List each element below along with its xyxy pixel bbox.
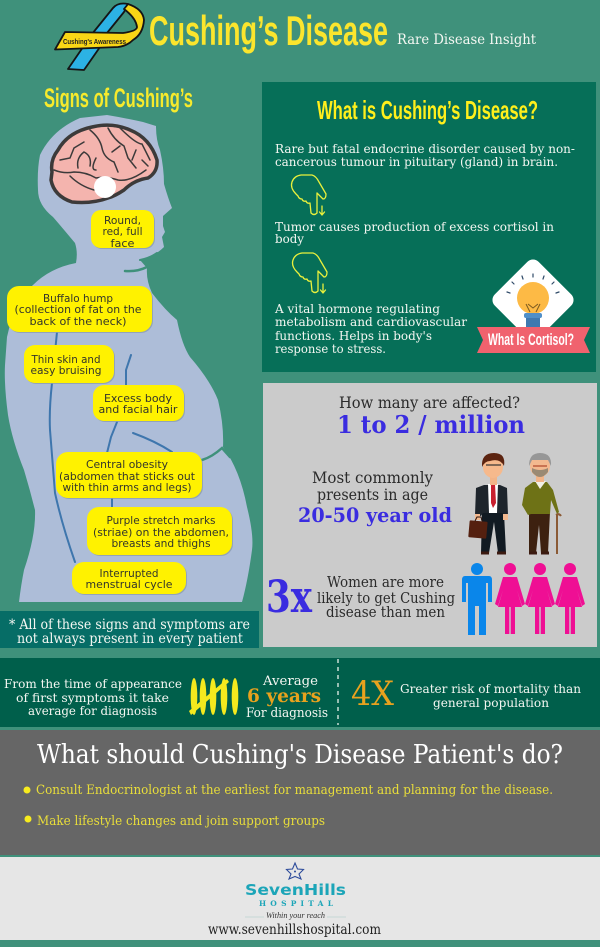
label: stretch marks: (striae) on the abdomen, [93,527,229,539]
text: time to diagnosis: average for diagnosis [28,703,157,718]
text: 3x stat: 3x [266,572,313,623]
text: hormone description: response to stress. [275,341,386,356]
title: Cushing’s Disease [149,7,388,54]
icon: woman figure [525,563,555,634]
icon: man figure [462,563,492,635]
text: definition: cancerous tumour in pituitary (gland) in brain. [275,154,558,169]
text: women more likely: disease than men [326,603,445,621]
label: menstrual cycle [72,562,187,595]
icon: woman figure [495,563,525,634]
label: menstrual cycle: Interrupted [100,568,158,580]
label: excess hair [93,385,185,422]
icon: cortisol light bulb [477,256,590,353]
text: women more likely: likely to get Cushing [317,589,455,607]
label: stretch marks [87,507,233,556]
text: six years [246,674,328,721]
label: stretch marks: breasts and thighs [112,538,210,550]
label: round face: Round, [104,215,141,227]
panel: what patients should do [0,730,600,855]
subtitle: Rare Disease Insight [397,32,536,48]
label: central obesity: Central obesity [86,459,168,471]
text: women more likely: Women are more [327,573,444,591]
label: round face: face [110,238,134,250]
silhouette [5,115,252,602]
panel: diagnosis and mortality band [0,658,600,727]
logo: SevenHills Hospital [245,863,346,920]
icon: pointing hand [292,253,327,293]
text: women more likely [317,573,455,621]
text: age range: 20-50 year old [298,503,452,527]
label: thin skin: easy bruising [30,365,102,377]
text: time to diagnosis: of first symptoms it take [16,690,169,705]
label: central obesity [56,452,203,499]
panel: how many are affected [263,383,597,647]
text: age range: Most commonly [312,468,433,487]
text: tumor causes cortisol: Tumor causes production of excess cortisol in [275,219,554,234]
text: 4x stat: 4X [351,674,395,714]
text: prevalence: 1 to 2 / million [337,410,525,439]
icon: woman figure [555,563,585,634]
callout: symptom note: * All of these signs and symptoms are [9,617,250,633]
logo: SevenHills Hospital: SevenHills [245,881,346,899]
text: definition [275,141,575,169]
label: stretch marks: Purple stretch marks [106,515,216,527]
panel: body silhouette with signs [5,115,252,602]
body lines [50,253,230,562]
icon: younger man with briefcase [468,453,508,553]
logo: SevenHills Hospital: HOSPITAL [259,899,334,908]
text: time to diagnosis: From the time of appearance [4,676,182,691]
label: central obesity: (abdomen that sticks out [59,471,195,483]
text: prevalence [337,394,525,439]
text: six years: 6 years [247,685,321,707]
text: mortality risk: Greater risk of mortality than [400,681,581,696]
logo: SevenHills Hospital: Within your reach [266,911,325,920]
label: menstrual cycle: menstrual cycle [86,579,172,591]
text: age range [298,468,452,527]
heading: signs of Cushing's: Signs of Cushing’s [44,83,193,113]
panel: hospital footer [0,857,600,940]
panel: what is Cushing's disease [262,82,596,372]
callout: symptom note [0,611,259,648]
label: buffalo hump: back of the neck) [30,316,126,328]
text: mortality risk [400,681,581,710]
label: thin skin: Thin skin and [31,354,101,366]
label: central obesity: with thin arms and legs) [62,482,192,494]
label: buffalo hump: Buffalo hump [43,293,113,305]
text: tumor causes cortisol: body [275,231,305,246]
icon: awareness ribbon: Cushing's Awareness [63,37,126,46]
banner [477,327,590,353]
text: hormone description [274,301,467,356]
label: excess hair: Excess body [104,393,172,405]
text: hormone description: functions. Helps in body's [275,328,432,343]
label: excess hair: and facial hair [98,404,178,416]
label: buffalo hump: (collection of fat on the [14,304,142,316]
label: buffalo hump [7,286,153,333]
text: time to diagnosis [4,676,182,718]
text: six years: Average [262,674,318,689]
text: prevalence: How many are affected? [339,394,520,412]
text: age range: presents in age [317,485,428,504]
label: thin skin [24,345,115,384]
text: hormone description: metabolism and cardiovascular [275,314,467,329]
text: six years: For diagnosis [246,706,328,721]
icon: awareness ribbon [55,4,144,70]
text: definition: Rare but fatal endocrine disorder caused by non- [275,141,575,156]
bullet: lifestyle changes: Make lifestyle changes and join support groups [37,814,325,829]
icon: brain [51,125,157,202]
label: round face [91,210,155,250]
text: hormone description: A vital hormone regulating [274,301,440,316]
text: website: www.sevenhillshospital.com [208,922,381,938]
icon: tally marks [189,678,238,715]
label: round face: red, full [102,226,142,238]
icon: older man with cane [522,453,561,554]
text: mortality risk: general population [433,695,549,710]
text: tumor causes cortisol [275,219,554,246]
icon: pointing hand [292,175,326,215]
bullet: consult endocrinologist: Consult Endocrinologist at the earliest for management and planning for the disease. [36,783,553,798]
callout: symptom note: not always present in every patient [17,631,244,647]
